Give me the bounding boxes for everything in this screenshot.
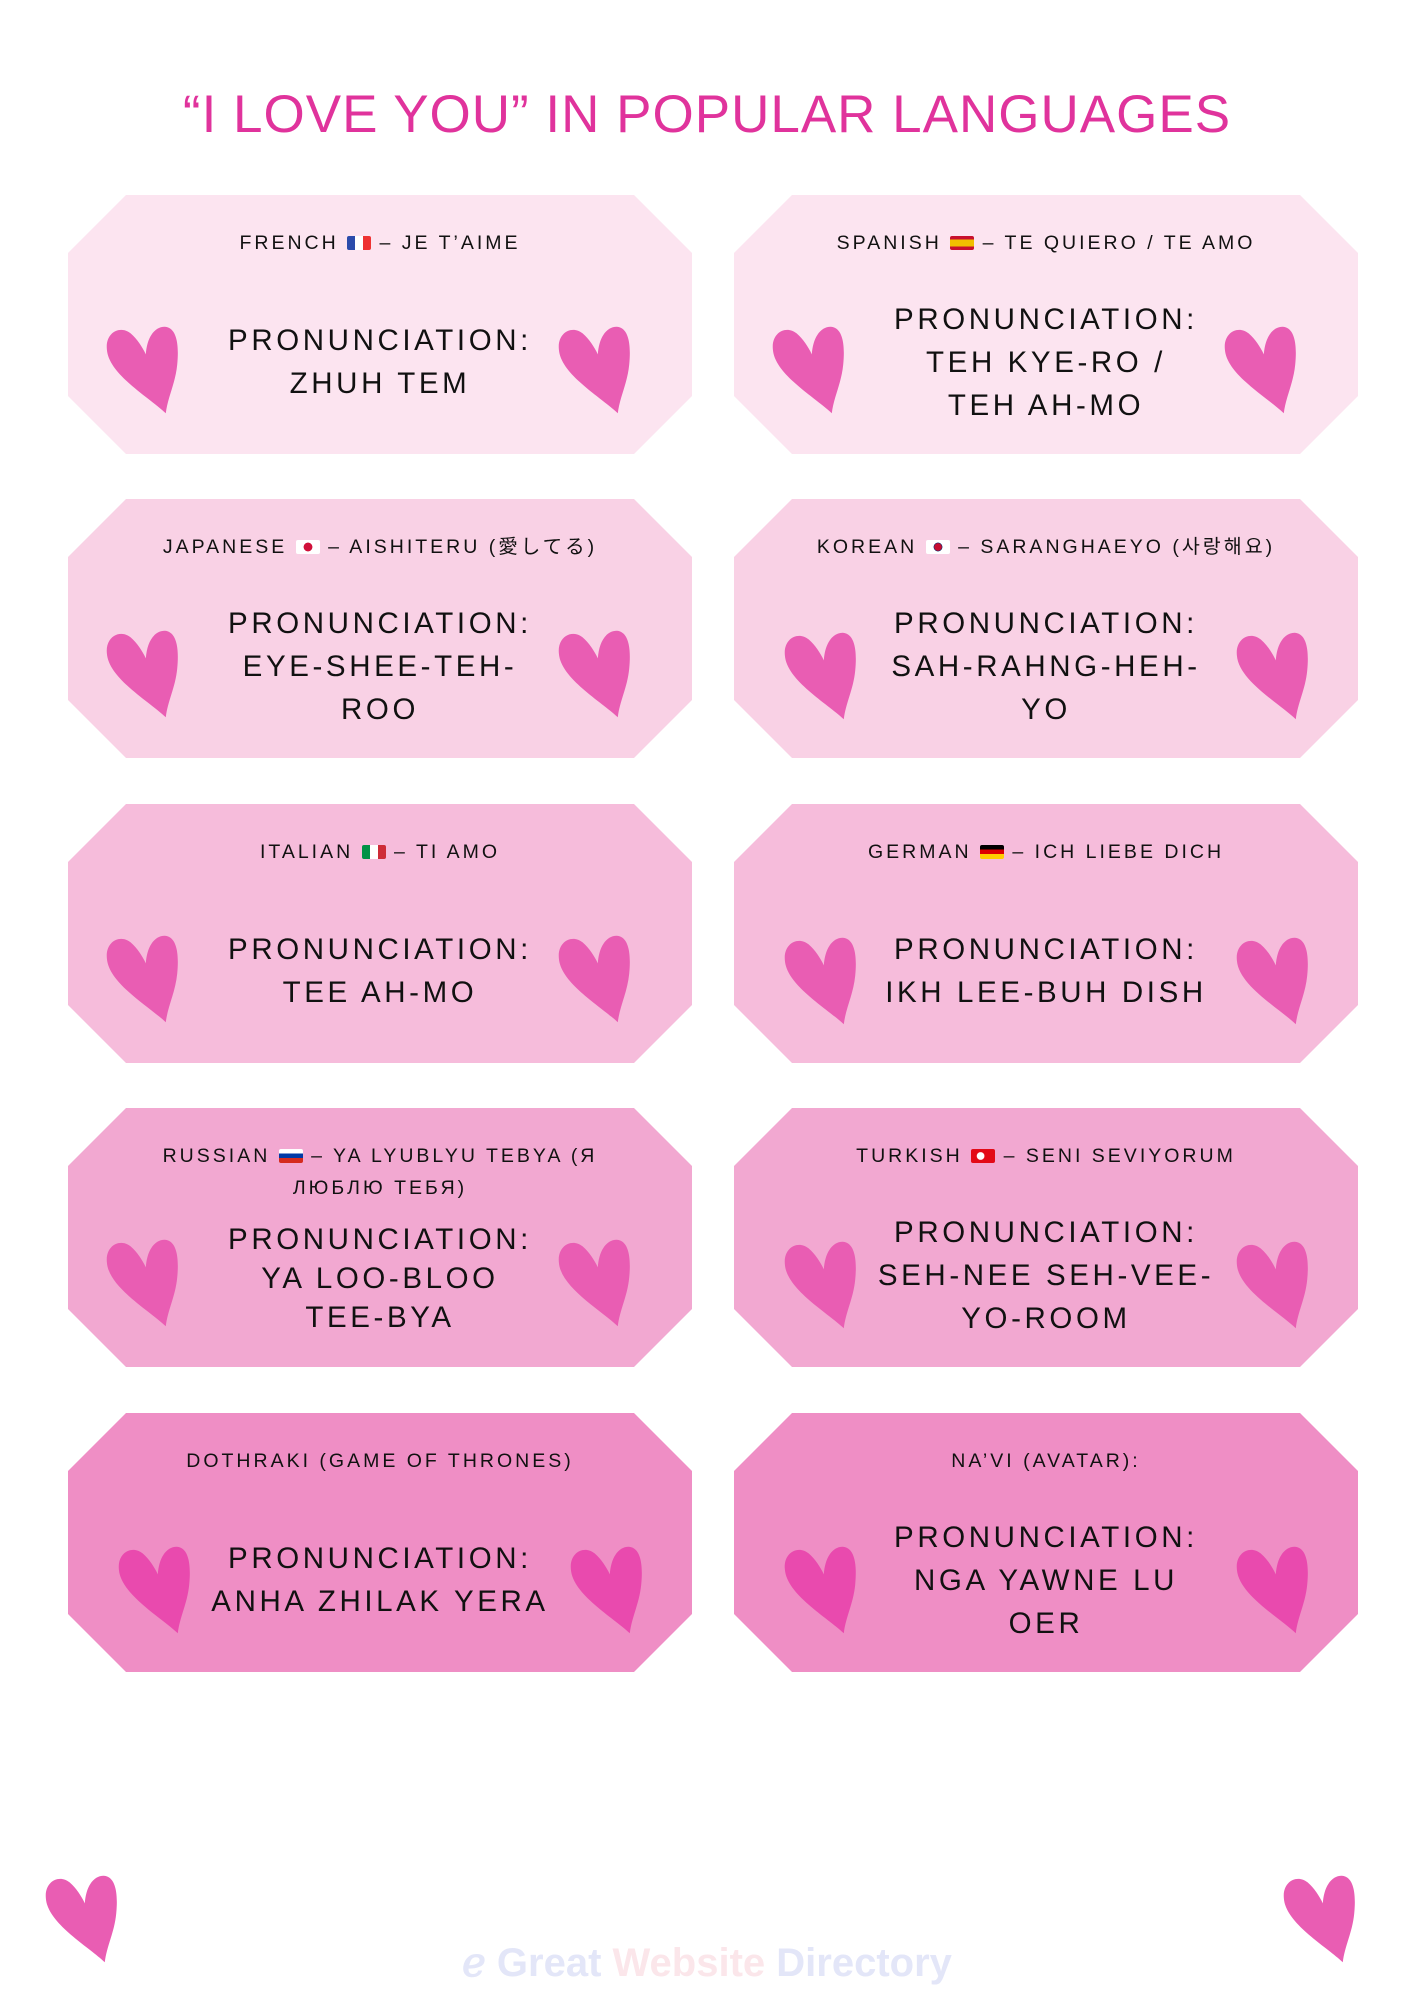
pronunciation: navi: PRONUNCIATION:	[894, 1521, 1198, 1554]
title: “I LOVE YOU” IN POPULAR LANGUAGES	[183, 85, 1231, 144]
header: navi: NA’VI (AVATAR):	[951, 1450, 1141, 1472]
pronunciation: turkish: YO-ROOM	[961, 1302, 1131, 1335]
icon: heart left	[784, 938, 856, 1024]
icon: heart right	[558, 326, 630, 414]
pronunciation: turkish	[879, 1221, 1210, 1328]
panel: korean	[734, 499, 1358, 758]
pronunciation: french: ZHUH TEM	[290, 367, 470, 400]
icon: heart left	[784, 1242, 856, 1328]
header: korean: KOREAN – SARANGHAEYO (사랑해요)	[817, 536, 1275, 558]
pronunciation: navi: OER	[1009, 1607, 1083, 1640]
pronunciation: japanese: PRONUNCIATION:	[228, 607, 532, 640]
pronunciation: german: IKH LEE-BUH DISH	[885, 976, 1207, 1009]
icon: heart right	[1236, 1546, 1308, 1634]
icon: heart left	[784, 1546, 856, 1634]
icon: heart right	[1224, 326, 1296, 414]
panel: japanese	[68, 499, 692, 758]
pronunciation: spanish	[896, 308, 1192, 416]
header: japanese: JAPANESE – AISHITERU (愛してる)	[163, 536, 597, 558]
panel: spanish	[734, 195, 1358, 454]
icon: heart right	[558, 630, 630, 718]
header: german: GERMAN – ICH LIEBE DICH	[868, 841, 1224, 863]
header: italian: ITALIAN – TI AMO	[260, 841, 500, 863]
header: russian: RUSSIAN – YA LYUBLYU TEBYA (Я ЛЮБЛЮ ТЕБЯ)	[163, 1145, 597, 1199]
pronunciation: navi: NGA YAWNE LU	[914, 1564, 1178, 1597]
pronunciation: dothraki: ANHA ZHILAK YERA	[211, 1585, 549, 1618]
pronunciation: italian	[230, 938, 526, 1002]
pronunciation: navi	[896, 1526, 1192, 1634]
header: italian	[262, 844, 496, 859]
panel: navi	[734, 1413, 1358, 1672]
icon: heart left	[118, 1546, 190, 1634]
panel: german	[734, 804, 1358, 1063]
pronunciation: turkish: PRONUNCIATION:	[894, 1216, 1198, 1249]
icon: heart right	[1236, 938, 1308, 1024]
icon: heart left	[106, 630, 178, 718]
pronunciation: french: PRONUNCIATION:	[228, 324, 532, 357]
pronunciation: dothraki	[211, 1547, 545, 1611]
icon: bottom heart left	[46, 1876, 117, 1962]
icon: heart left	[784, 632, 856, 720]
pronunciation: dothraki: PRONUNCIATION:	[228, 1542, 532, 1575]
pronunciation: russian	[230, 1228, 526, 1327]
header: french	[241, 236, 517, 250]
icon: bottom heart right	[1284, 1876, 1355, 1962]
icon: heart right	[570, 1546, 642, 1634]
pronunciation: spanish: TEH AH-MO	[948, 389, 1144, 422]
panel: russian	[68, 1108, 692, 1367]
pronunciation: german: PRONUNCIATION:	[894, 933, 1198, 966]
icon: heart left	[106, 1240, 178, 1326]
pronunciation: spanish: PRONUNCIATION:	[894, 303, 1198, 336]
watermark: ℯ Great Website Directory	[462, 1941, 952, 1985]
icon: heart right	[558, 1240, 630, 1326]
panel: french	[68, 195, 692, 454]
icon: heart left	[106, 326, 178, 414]
panel: dothraki	[68, 1413, 692, 1672]
pronunciation: korean: SAH-RAHNG-HEH-	[891, 650, 1201, 683]
icon: heart right	[1236, 1242, 1308, 1328]
pronunciation: french	[230, 329, 526, 394]
pronunciation: german	[888, 938, 1201, 1002]
pronunciation: italian: PRONUNCIATION:	[228, 933, 532, 966]
header: dothraki: DOTHRAKI (GAME OF THRONES)	[186, 1450, 574, 1472]
icon: heart left	[772, 326, 844, 414]
pronunciation: japanese: ROO	[341, 693, 419, 726]
pronunciation: russian: YA LOO-BLOO	[261, 1262, 499, 1295]
icon: heart right	[1236, 632, 1308, 720]
pronunciation: korean: PRONUNCIATION:	[894, 607, 1198, 640]
panel: italian	[68, 804, 692, 1063]
pronunciation: japanese: EYE-SHEE-TEH-	[243, 650, 517, 683]
pronunciation: russian: PRONUNCIATION:	[228, 1223, 532, 1256]
pronunciation: italian: TEE AH-MO	[283, 976, 477, 1009]
icon: heart left	[106, 936, 178, 1022]
header: german	[869, 844, 1220, 859]
pronunciation: russian: TEE-BYA	[305, 1301, 455, 1334]
pronunciation: korean	[892, 612, 1196, 720]
panel: turkish	[734, 1108, 1358, 1367]
header: french: FRENCH – JE T’AIME	[239, 232, 521, 254]
pronunciation: turkish: SEH-NEE SEH-VEE-	[878, 1259, 1214, 1292]
pronunciation: spanish: TEH KYE-RO /	[926, 346, 1166, 379]
header: turkish: TURKISH – SENI SEVIYORUM	[856, 1145, 1236, 1167]
pronunciation: japanese	[230, 612, 526, 720]
header: turkish	[856, 1148, 1232, 1163]
header: spanish: SPANISH – TE QUIERO / TE AMO	[837, 232, 1255, 254]
pronunciation: korean: YO	[1021, 693, 1071, 726]
icon: heart right	[558, 936, 630, 1022]
